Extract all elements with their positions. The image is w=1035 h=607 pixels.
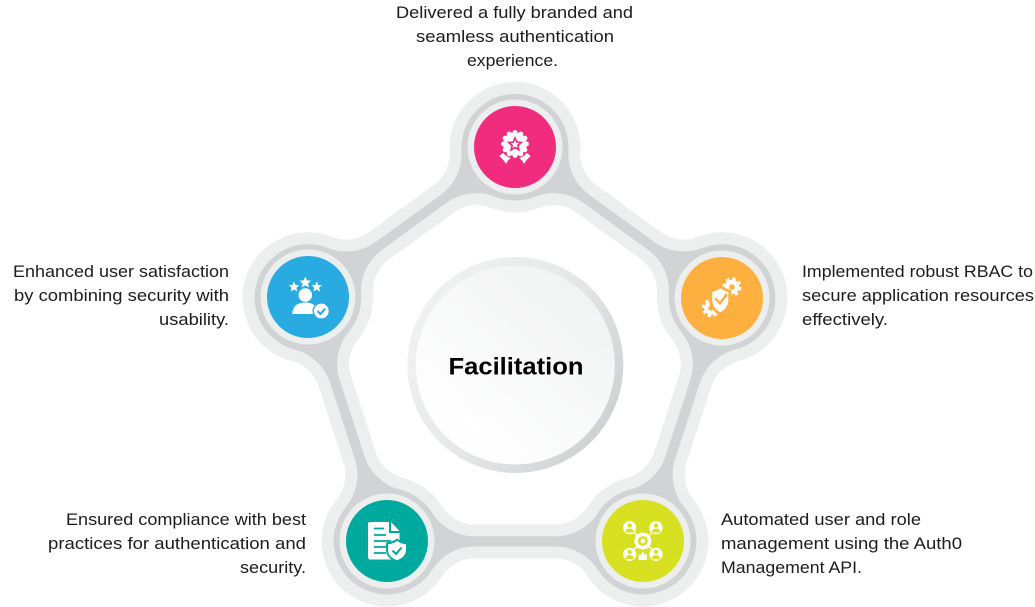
text: bottom right description: Automated user and role bbox=[721, 511, 921, 529]
icon: gears with shield bbox=[703, 279, 740, 316]
node: compliance (bottom left) bbox=[340, 494, 434, 588]
center circle bbox=[407, 257, 623, 473]
center title: Facilitation bbox=[448, 354, 584, 380]
text: bottom right description bbox=[721, 511, 962, 577]
text: top description: Delivered a fully branded and bbox=[396, 4, 633, 22]
pentagon ring bbox=[255, 94, 775, 595]
ring: dark inner band bbox=[255, 94, 775, 595]
text: bottom right description: management using the Auth0 bbox=[721, 535, 962, 553]
ring: light outer band bbox=[255, 94, 775, 595]
icon: users around a gear bbox=[623, 521, 663, 561]
text: bottom left description: practices for authentication and bbox=[48, 535, 306, 553]
node: user and role management (bottom right) bbox=[596, 494, 690, 588]
text: top description: experience. bbox=[467, 52, 558, 70]
text: right description: effectively. bbox=[802, 311, 888, 329]
text: right description bbox=[802, 263, 1034, 329]
text: top description: seamless authentication bbox=[416, 28, 614, 46]
text: bottom right description: Management API. bbox=[721, 559, 862, 577]
icon: user with stars and check bbox=[289, 277, 330, 320]
text: left description: usability. bbox=[159, 311, 229, 329]
node: RBAC (right) bbox=[674, 250, 770, 346]
text: left description bbox=[13, 263, 229, 329]
node: branded experience (top) bbox=[468, 100, 562, 194]
node: user satisfaction (left) bbox=[260, 250, 356, 344]
text: left description: Enhanced user satisfaction bbox=[13, 263, 229, 281]
icon: document with shield bbox=[368, 522, 408, 562]
text: bottom left description: security. bbox=[240, 559, 306, 577]
text: left description: by combining security with bbox=[14, 287, 229, 305]
icon: rosette badge with star bbox=[499, 129, 531, 164]
text: right description: Implemented robust RBAC to bbox=[802, 263, 1033, 281]
text: bottom left description: Ensured compliance with best bbox=[66, 511, 306, 529]
text: top description bbox=[396, 4, 633, 70]
text: bottom left description bbox=[48, 511, 306, 577]
text: right description: secure application resources bbox=[802, 287, 1034, 305]
